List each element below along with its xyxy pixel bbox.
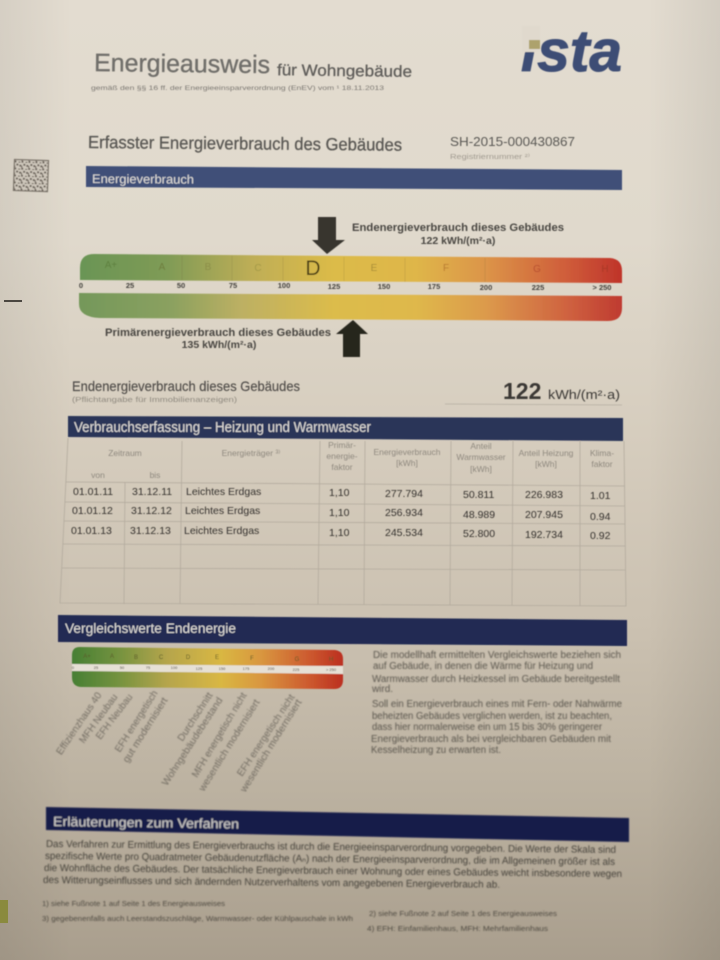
registration number: Registriernummer ²⁾ [450, 152, 530, 161]
table rows: 01.01.11 [73, 486, 113, 498]
table rows: 207.945 [525, 509, 563, 521]
rotated building labels: Effizienzhaus 40 [55, 690, 105, 757]
table rows: Leichtes Erdgas [186, 486, 261, 498]
scale tick labels: 75 [229, 281, 237, 290]
comparison scale: A+ [83, 654, 91, 660]
comparison note: Kesselheizung zu erwarten ist. [371, 745, 501, 756]
table column headers: Energieträger ³⁾ [222, 448, 280, 458]
headline value label [72, 378, 300, 404]
comparison note: Energieverbrauch als bei vergleichbaren Gebäuden mit [371, 734, 611, 745]
footnotes [42, 899, 557, 933]
comparison scale [72, 647, 343, 689]
table rows: 256.934 [385, 507, 423, 519]
table rows: 48.989 [463, 509, 495, 521]
scale tick labels: 150 [378, 282, 390, 291]
title [94, 49, 412, 81]
comparison scale: 75 [146, 665, 151, 670]
comparison scale: > 250 [326, 667, 337, 672]
scale tick labels [79, 281, 611, 292]
arrow: primary energy [336, 320, 368, 357]
table column headers: Anteil Heizung [519, 448, 574, 458]
table rows: 277.794 [385, 488, 423, 500]
table column headers: energie- [326, 451, 358, 461]
headline value: 122 [503, 378, 541, 404]
comparison scale: B [134, 655, 138, 661]
table column headers: Anteil [470, 441, 492, 451]
energy scale: top bar: B [205, 262, 212, 273]
table rows: 31.12.12 [131, 505, 172, 517]
table column headers: Klima- [590, 448, 614, 458]
energy scale: top bar: G [533, 264, 541, 275]
energy scale: top bar: C [254, 263, 262, 274]
table column headers: von [91, 470, 105, 480]
comparison scale: 225 [293, 667, 300, 672]
label: primary energy: 135 kWh/(m²·a) [182, 339, 256, 351]
explanation text: spezifische Werte pro Quadratmeter Gebäudenutzfläche (Aₙ) nach der Energieeinsparverordnung, die im Allgemeinen größer ist als [45, 851, 615, 868]
table rows: 31.12.13 [130, 525, 171, 537]
comparison note: beheizten Gebäudes verglichen werden, ist zu beachten, [372, 711, 612, 722]
table rows: 31.12.11 [132, 486, 172, 498]
energy scale: top bar [80, 254, 622, 283]
table rows: 01.01.13 [71, 525, 112, 537]
energy scale: top bar: E [371, 263, 378, 274]
table column headers: Primär- [328, 440, 356, 450]
comparison scale: 175 [243, 666, 250, 671]
scale tick labels: 100 [278, 281, 290, 290]
energy scale: top bar: D [305, 257, 321, 280]
table rows: 1,10 [329, 487, 350, 499]
table column headers: faktor [331, 462, 353, 472]
energy scale: bottom bar [79, 293, 622, 321]
section bar: Erläuterungen: Erläuterungen zum Verfahren [53, 814, 239, 832]
rotated building labels: Durchschnitt [176, 690, 216, 744]
heading: recorded consumption: Erfasster Energieverbrauch des Gebäudes [88, 132, 402, 155]
label: final energy [352, 222, 564, 247]
table column headers: Warmwasser [456, 452, 506, 462]
table rows: 245.534 [385, 527, 423, 539]
table rows: 226.983 [525, 489, 563, 501]
table rows: 1.01 [590, 490, 611, 502]
comparison scale: 125 [196, 666, 203, 671]
title: für Wohngebäude [277, 62, 412, 81]
comparison scale: G [295, 657, 300, 663]
label: primary energy [105, 327, 331, 351]
table column headers: [kWh] [470, 464, 492, 474]
label: final energy: 122 kWh/(m²·a) [421, 235, 495, 247]
comparison scale: 200 [268, 666, 275, 671]
table column headers: [kWh] [396, 458, 418, 468]
title: Energieausweis [94, 49, 270, 79]
icon: QR code [13, 159, 49, 192]
registration number: SH-2015-000430867 [450, 135, 575, 149]
scale tick labels: 50 [177, 281, 185, 290]
table rows: 192.734 [525, 529, 563, 541]
comparison note: Die modellhaft ermittelten Vergleichswerte beziehen sich [373, 650, 621, 661]
comparison note: Warmwasser durch Heizkessel im Gebäude bereitgestellt [372, 674, 620, 685]
rotated building labels: MFH Neubau [77, 692, 120, 746]
comparison scale: 0 [72, 665, 75, 670]
footnotes: 4) EFH: Einfamilienhaus, MFH: Mehrfamilienhaus [367, 924, 548, 933]
table rows: 50.811 [463, 489, 494, 501]
headline value [445, 378, 622, 405]
arrow: final energy [312, 217, 345, 254]
comparison scale: D [186, 655, 191, 661]
comparison scale: C [159, 655, 164, 661]
section bar: Energieverbrauch [86, 166, 622, 190]
comparison scale: 50 [120, 665, 125, 670]
panel: consumption table [60, 416, 626, 606]
table rows: 01.01.12 [72, 505, 113, 517]
section bar: Energieverbrauch: Energieverbrauch [92, 172, 194, 187]
comparison scale: E [215, 655, 219, 661]
headline value label: (Pflichtangabe für Immobilienanzeigen) [72, 395, 238, 404]
table column headers: [kWh] [535, 459, 557, 469]
comparison note: dass hier normalerweise ein um 15 bis 30% geringerer [372, 722, 603, 733]
table rows: Leichtes Erdgas [184, 525, 259, 537]
scale tick labels: 25 [126, 281, 134, 290]
energy scale: top bar: A+ [105, 260, 117, 271]
registration number [450, 135, 575, 161]
comparison labels and body text [42, 650, 629, 933]
table rows: Leichtes Erdgas [185, 505, 260, 517]
comparison scale: A [110, 654, 114, 660]
rotated building labels: wesentlich modernisiert [238, 698, 305, 795]
comparison note [371, 650, 622, 756]
document content [13, 19, 627, 689]
table column headers: faktor [591, 459, 613, 469]
comparison scale: 100 [171, 665, 178, 670]
logo: ista: ista [521, 19, 622, 84]
scale tick labels: 175 [428, 282, 440, 291]
rotated building labels: MFH energetisch nicht [190, 691, 250, 780]
subtitle: gemäß den §§ 16 ff. der Energieeinsparverordnung (EnEV) vom ¹ 18.11.2013 [91, 85, 385, 92]
table rows: 1,10 [329, 507, 350, 519]
table rows [71, 486, 611, 542]
section bar: Erläuterungen [46, 807, 629, 842]
footnotes: 1) siehe Fußnote 1 auf Seite 1 des Energieausweises [42, 899, 225, 908]
footnotes: 2) siehe Fußnote 2 auf Seite 1 des Energieausweises [369, 909, 557, 918]
rotated building labels: gut modernisiert [121, 696, 171, 765]
headline value: kWh/(m²·a) [548, 388, 620, 402]
table column headers: bis [150, 470, 160, 480]
comparison scale: 25 [94, 665, 99, 670]
table column headers: Zeitraum [108, 448, 142, 458]
energy scale: top bar: A [159, 262, 166, 273]
table rows: 0.94 [590, 511, 611, 523]
rotated building labels: Wohngebäudebestand [160, 696, 226, 788]
rotated building labels: EFH energetisch [113, 689, 161, 754]
label: final energy: Endenergieverbrauch dieses Gebäudes [352, 222, 564, 234]
comparison note: Soll ein Energieverbrauch eines mit Fern- oder Nahwärme [372, 699, 622, 710]
rotated building labels [55, 689, 305, 795]
table column headers: Energieverbrauch [373, 447, 441, 457]
comparison scale: H [329, 657, 333, 663]
explanation text: des Witterungseinflusses und sich ändernden Nutzerverhaltens vom angegebenen Energieverbrauch ab. [43, 875, 500, 891]
comparison scale: F [250, 656, 254, 662]
comparison scale: 150 [219, 666, 226, 671]
scale tick labels: > 250 [593, 283, 611, 292]
table rows: 52.800 [463, 528, 495, 540]
comparison note: auf Gebäude, in denen die Wärme für Heizung und [373, 661, 593, 672]
footnotes: 3) gegebenenfalls auch Leerstandszuschläge, Warmwasser- oder Kühlpauschale in kWh [42, 914, 353, 923]
rotated building labels: EFH energetisch nicht [235, 692, 298, 779]
label: primary energy: Primärenergieverbrauch dieses Gebäudes [105, 327, 331, 339]
table rows: 0.92 [590, 530, 611, 542]
table heading bar: Verbrauchserfassung – Heizung und Warmwasser [74, 420, 371, 436]
energy scale: top bar: H [601, 264, 609, 275]
rotated building labels: EFH Neubau [94, 692, 135, 742]
explanation text [43, 839, 622, 891]
scale tick labels: 0 [79, 281, 83, 290]
section bar: Vergleichswerte Endenergie [58, 615, 627, 646]
explanation text: die Wohnfläche des Gebäudes. Der tatsächliche Energieverbrauch einer Wohnung oder eines Gebäudes weicht insbesondere wegen [44, 863, 622, 880]
section bar: Vergleichswerte Endenergie: Vergleichswerte Endenergie [65, 621, 236, 636]
comparison note: wird. [371, 684, 393, 695]
scale tick labels: 125 [328, 282, 340, 291]
energy scale: top bar: F [443, 263, 449, 274]
scale tick labels: 200 [480, 283, 492, 292]
table column headers [91, 440, 614, 480]
rotated building labels: wesentlich modernisiert [197, 698, 263, 794]
table rows: 1,10 [329, 527, 350, 539]
headline value label: Endenergieverbrauch dieses Gebäudes [72, 378, 300, 394]
scale tick labels: 225 [532, 283, 544, 292]
explanation text: Das Verfahren zur Ermittlung des Energieverbrauchs ist durch die Energieeinsparverordnung vorgegeben. Die Werte der Skala sind [46, 839, 616, 856]
table heading bar [68, 416, 623, 441]
